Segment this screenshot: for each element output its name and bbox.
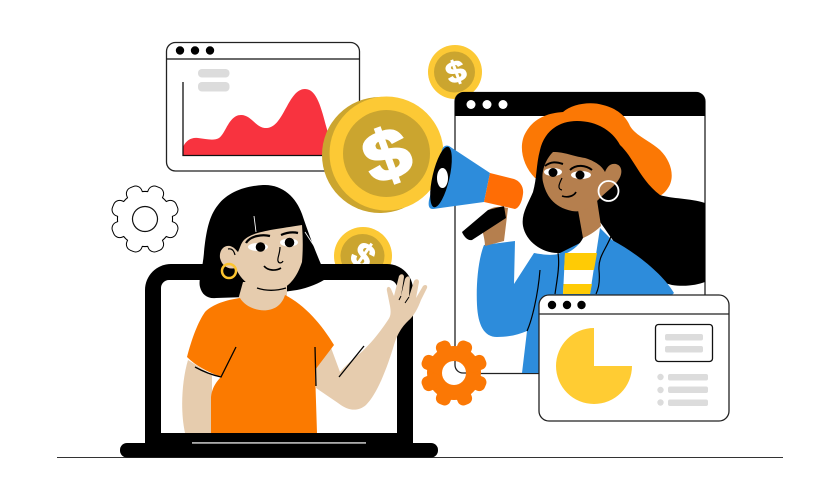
icon: small coin top: $	[441, 53, 471, 91]
chart: pie	[556, 328, 632, 404]
long hair	[523, 121, 705, 286]
icon: small coin top	[428, 45, 482, 99]
face details	[544, 162, 592, 197]
icon: orange gear	[410, 329, 498, 417]
icon: large coin	[322, 96, 444, 213]
icon: coin behind laptop: $	[343, 233, 383, 278]
figure: woman with megaphone	[426, 103, 705, 373]
panel: presenter window	[455, 92, 705, 374]
legend box	[656, 324, 712, 362]
face	[220, 225, 303, 291]
bang slit	[254, 216, 256, 232]
icon: large coin: $	[353, 111, 421, 199]
figure: waving woman	[182, 185, 427, 433]
hat	[522, 103, 672, 196]
face	[542, 152, 621, 211]
white shirt	[563, 228, 600, 294]
ground line	[57, 456, 783, 458]
shirt stripes	[563, 253, 597, 294]
face details	[228, 232, 298, 290]
icon: megaphone	[426, 145, 523, 240]
right arm and hand	[316, 274, 427, 410]
t-shirt	[187, 295, 334, 433]
hand	[482, 207, 508, 246]
hair	[200, 185, 327, 298]
jacket	[477, 228, 674, 373]
sleeve seams	[195, 347, 316, 386]
neck	[238, 282, 287, 315]
legend list	[657, 374, 708, 406]
neck	[578, 200, 601, 238]
jacket seams	[527, 234, 612, 331]
left arm	[182, 360, 212, 433]
chart: red area	[183, 89, 328, 155]
icon: outline gear	[101, 175, 189, 263]
icon: coin behind laptop	[334, 227, 392, 285]
earring	[222, 264, 236, 278]
earring	[598, 181, 618, 201]
panel: area chart window	[166, 42, 360, 171]
panel: pie chart window	[539, 295, 729, 421]
laptop	[120, 264, 438, 458]
